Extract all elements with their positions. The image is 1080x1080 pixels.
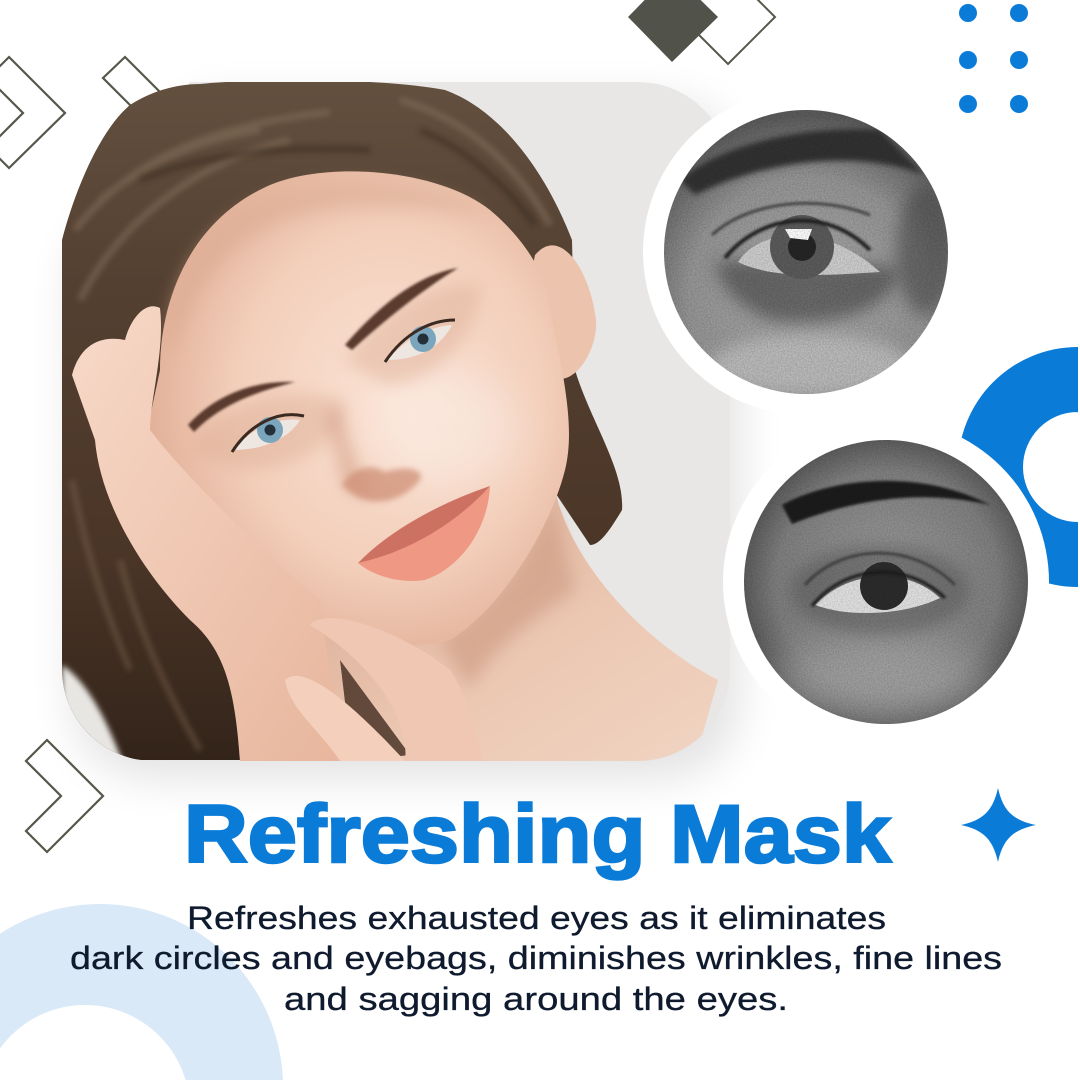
decorative outlined diamond top bbox=[680, 0, 775, 64]
face highlight bbox=[380, 370, 520, 490]
eye white bbox=[815, 576, 940, 613]
skin tone bbox=[660, 105, 955, 400]
iris bbox=[770, 215, 834, 279]
decorative circle: light blue arch bbox=[0, 904, 283, 1080]
pupil bbox=[788, 233, 816, 261]
right side shadow bbox=[897, 185, 953, 315]
skin grain bbox=[660, 105, 955, 400]
lower cheek highlight bbox=[710, 335, 910, 395]
decorative dots grid bbox=[959, 4, 1028, 113]
eyebrow left bbox=[188, 382, 295, 432]
white ring around eye photo 1 bbox=[643, 89, 969, 415]
white ring around eye photo 2 bbox=[723, 419, 1049, 745]
decorative small diamond top left bbox=[103, 57, 175, 120]
eyebrow bbox=[680, 129, 925, 195]
eye socket shadow bbox=[790, 545, 970, 635]
ear bbox=[531, 245, 596, 379]
lighter cheek bbox=[770, 640, 990, 720]
iris bbox=[860, 562, 908, 610]
nose side shadow bbox=[324, 404, 364, 499]
dark under eye bag bbox=[715, 260, 900, 323]
photo shadow bbox=[72, 100, 740, 779]
photo: tired eye with dark circles bbox=[660, 105, 955, 400]
decorative blue ring segment bbox=[958, 347, 1078, 587]
decorative dark diamond top bbox=[628, 0, 718, 62]
crease bbox=[805, 553, 955, 585]
skin grain bbox=[740, 435, 1035, 730]
title: Refreshing Mask bbox=[184, 789, 891, 880]
photo: eye with shadowed lids bbox=[740, 435, 1035, 730]
decorative chevron bottom left bbox=[26, 740, 103, 852]
forehead shade under the hairline bbox=[160, 184, 454, 344]
eye left bbox=[232, 415, 304, 452]
upper eyelid bbox=[812, 572, 945, 606]
upper hand bbox=[72, 306, 352, 761]
upper eyelid bbox=[725, 221, 870, 258]
description text: and sagging around the eyes. bbox=[284, 981, 788, 1017]
photo background bbox=[188, 82, 712, 124]
panel: woman portrait photo bbox=[62, 80, 730, 761]
face bbox=[145, 171, 569, 645]
catchlight bbox=[785, 229, 812, 240]
description text: Refreshes exhausted eyes as it eliminates bbox=[187, 900, 886, 936]
hair behind the head bbox=[62, 80, 622, 761]
description text: dark circles and eyebags, diminishes wrinkles, fine lines bbox=[70, 940, 1002, 976]
nose bbox=[342, 468, 421, 501]
neck and shoulder bbox=[300, 490, 718, 761]
neck shadow below chin bbox=[440, 500, 575, 690]
icon: four point sparkle bbox=[961, 788, 1036, 862]
decorative chevrons top left bbox=[0, 57, 65, 168]
lips bbox=[358, 486, 490, 581]
eyebrow right bbox=[345, 268, 458, 350]
skin tone bbox=[740, 435, 1035, 730]
eyebrow bbox=[782, 481, 990, 524]
lower hand bbox=[285, 618, 458, 761]
eye right bbox=[385, 320, 455, 362]
description text bbox=[70, 900, 1002, 1017]
eye socket shading bbox=[190, 284, 480, 470]
eye white bbox=[738, 235, 880, 275]
crease bbox=[712, 203, 870, 235]
